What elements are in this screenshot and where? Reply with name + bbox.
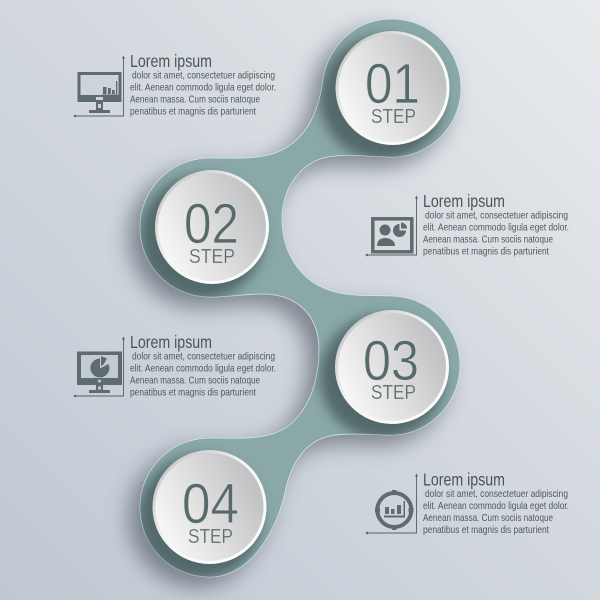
text block 2: penatibus et magnis dis parturient: [423, 246, 549, 258]
text block 1: penatibus et magnis dis parturient: [130, 106, 256, 118]
step 3 disc: [335, 310, 449, 424]
text block 1: elit. Aenean commodo ligula eget dolor.: [130, 82, 276, 94]
step 1 label: STEP: [371, 106, 416, 128]
text block 2: [423, 191, 569, 258]
step 1 number: 01: [365, 52, 420, 116]
step 4 label: STEP: [188, 526, 233, 548]
step 1 disc: [336, 31, 450, 145]
text block 4: Lorem ipsum: [423, 470, 505, 490]
step 2 number: 02: [184, 192, 239, 256]
text block 3: [130, 332, 276, 398]
text block 1: Lorem ipsum: [130, 51, 212, 71]
text block 4: penatibus et magnis dis parturient: [423, 524, 549, 536]
text block 2: Lorem ipsum: [423, 191, 505, 211]
icon: target with bar chart: [365, 474, 418, 534]
text block 1: dolor sit amet, consectetuer adipiscing: [132, 70, 275, 82]
step 4 number: 04: [182, 472, 239, 536]
text block 3: Aenean massa. Cum sociis natoque: [130, 374, 260, 386]
step 2 label: STEP: [189, 246, 235, 268]
text block 4: [423, 470, 569, 536]
step 3 label: STEP: [371, 382, 416, 404]
ribbon connector: [138, 19, 461, 579]
icon: presentation board with person and pie: [365, 196, 418, 256]
ribbon shadow: [129, 29, 450, 587]
step 4 disc: [152, 450, 266, 564]
text block 2: dolor sit amet, consectetuer adipiscing: [425, 210, 568, 222]
text block 3: dolor sit amet, consectetuer adipiscing: [132, 350, 275, 362]
icon: monitor with pie chart: [73, 336, 125, 398]
text block 4: Aenean massa. Cum sociis natoque: [423, 512, 553, 524]
icon: monitor with bar chart: [73, 56, 125, 118]
text block 4: dolor sit amet, consectetuer adipiscing: [425, 488, 568, 500]
text block 3: Lorem ipsum: [130, 332, 212, 352]
text block 2: Aenean massa. Cum sociis natoque: [423, 234, 553, 246]
text block 1: [130, 51, 276, 118]
text block 3: elit. Aenean commodo ligula eget dolor.: [130, 362, 276, 374]
step 3 number: 03: [363, 329, 419, 393]
text block 3: penatibus et magnis dis parturient: [130, 386, 256, 398]
step 2 disc: [155, 170, 269, 284]
text block 1: Aenean massa. Cum sociis natoque: [130, 94, 260, 106]
